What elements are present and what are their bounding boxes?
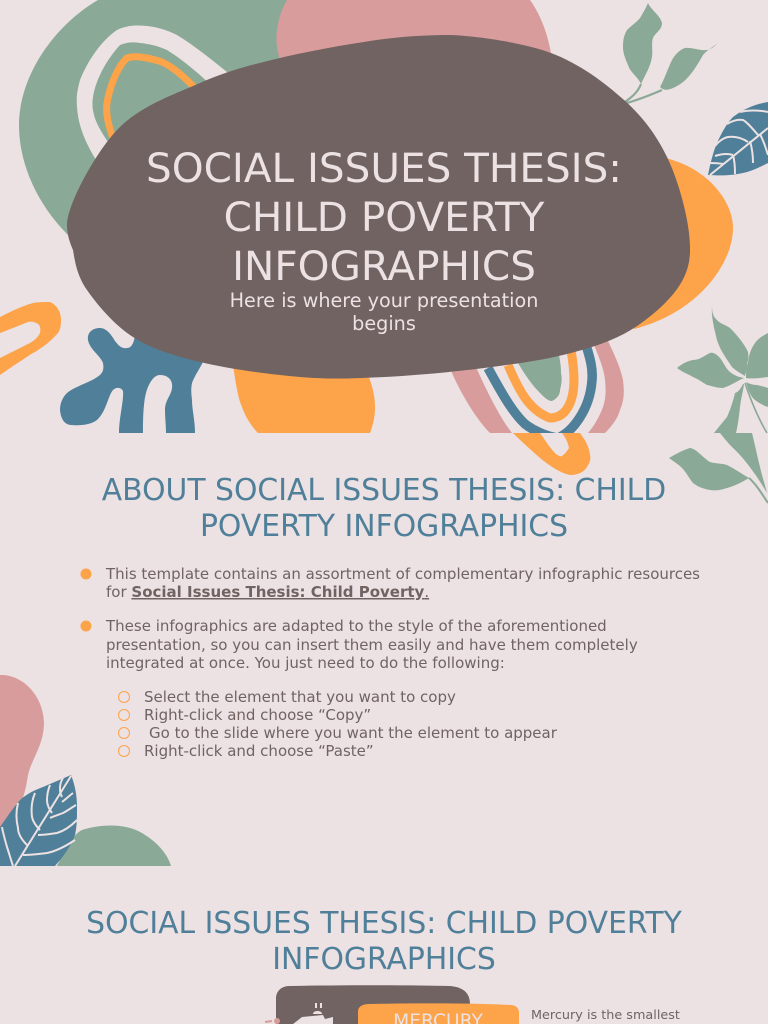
decorative shapes lower right xyxy=(513,433,768,503)
subtitle: Here is where your presentation xyxy=(230,289,538,312)
icon: white ship xyxy=(293,1003,333,1024)
list text: Right-click and choose “Copy” xyxy=(144,706,371,724)
title: CHILD POVERTY xyxy=(224,193,545,241)
icon: green leaves lower right xyxy=(669,433,768,503)
icon: dashes xyxy=(265,1021,272,1022)
shape: orange right blob xyxy=(634,158,733,329)
shape: pink blob lower left xyxy=(0,675,44,830)
shape: green mound lower left xyxy=(57,826,171,866)
icon: blue leaf top right xyxy=(708,102,768,175)
panel: cover slide xyxy=(0,0,768,438)
card: dark box xyxy=(276,985,470,1024)
icon: blue leaf lower left xyxy=(0,775,77,866)
shape: main brown blob xyxy=(67,35,690,379)
text block: integrated at once. You just need to do the following: xyxy=(106,654,505,672)
bullet text 2 xyxy=(80,617,638,672)
text block: presentation, so you can insert them easily and have them completely xyxy=(106,636,638,654)
decorative abstract shapes xyxy=(0,0,768,438)
subtitle: begins xyxy=(352,312,416,335)
bullet text 1 xyxy=(80,565,700,601)
list text: Select the element that you want to copy xyxy=(144,688,456,706)
shape: orange loop tail xyxy=(513,433,590,475)
title: SOCIAL ISSUES THESIS: xyxy=(146,144,622,192)
shape: pink blob xyxy=(276,0,551,58)
shape: flower leaves upper xyxy=(677,306,768,433)
description: Mercury is the smallest xyxy=(531,1008,680,1023)
shape: rainbow arch xyxy=(452,341,624,433)
icons: hollow bullets xyxy=(118,692,130,756)
step list xyxy=(118,688,558,760)
text block: This template contains an assortment of complementary infographic resources xyxy=(105,565,700,583)
icon: pink dot xyxy=(274,1018,280,1024)
text block: These infographics are adapted to the style of the aforementioned xyxy=(105,617,607,635)
heading: SOCIAL ISSUES THESIS: CHILD POVERTY xyxy=(86,906,683,941)
heading: ABOUT SOCIAL ISSUES THESIS: CHILD xyxy=(102,473,666,508)
panel: about slide xyxy=(0,433,768,866)
title: INFOGRAPHICS xyxy=(232,242,536,290)
shape: blue splat xyxy=(60,328,203,433)
icon: bullet xyxy=(80,620,92,632)
shape: orange loop left xyxy=(0,302,61,375)
text block: for Social Issues Thesis: Child Poverty. xyxy=(106,583,429,601)
heading: INFOGRAPHICS xyxy=(272,942,496,977)
heading: POVERTY INFOGRAPHICS xyxy=(200,509,568,544)
panel: infographic slide xyxy=(86,906,683,1024)
icon: bullet xyxy=(80,568,92,580)
list text: Go to the slide where you want the element to appear xyxy=(149,724,558,742)
shape: orange bottom blob xyxy=(233,365,375,433)
shape: green blob with rings xyxy=(19,0,287,235)
icon: top green leaves xyxy=(623,3,718,103)
list text: Right-click and choose “Paste” xyxy=(144,742,374,760)
label: orange box xyxy=(358,1003,519,1024)
